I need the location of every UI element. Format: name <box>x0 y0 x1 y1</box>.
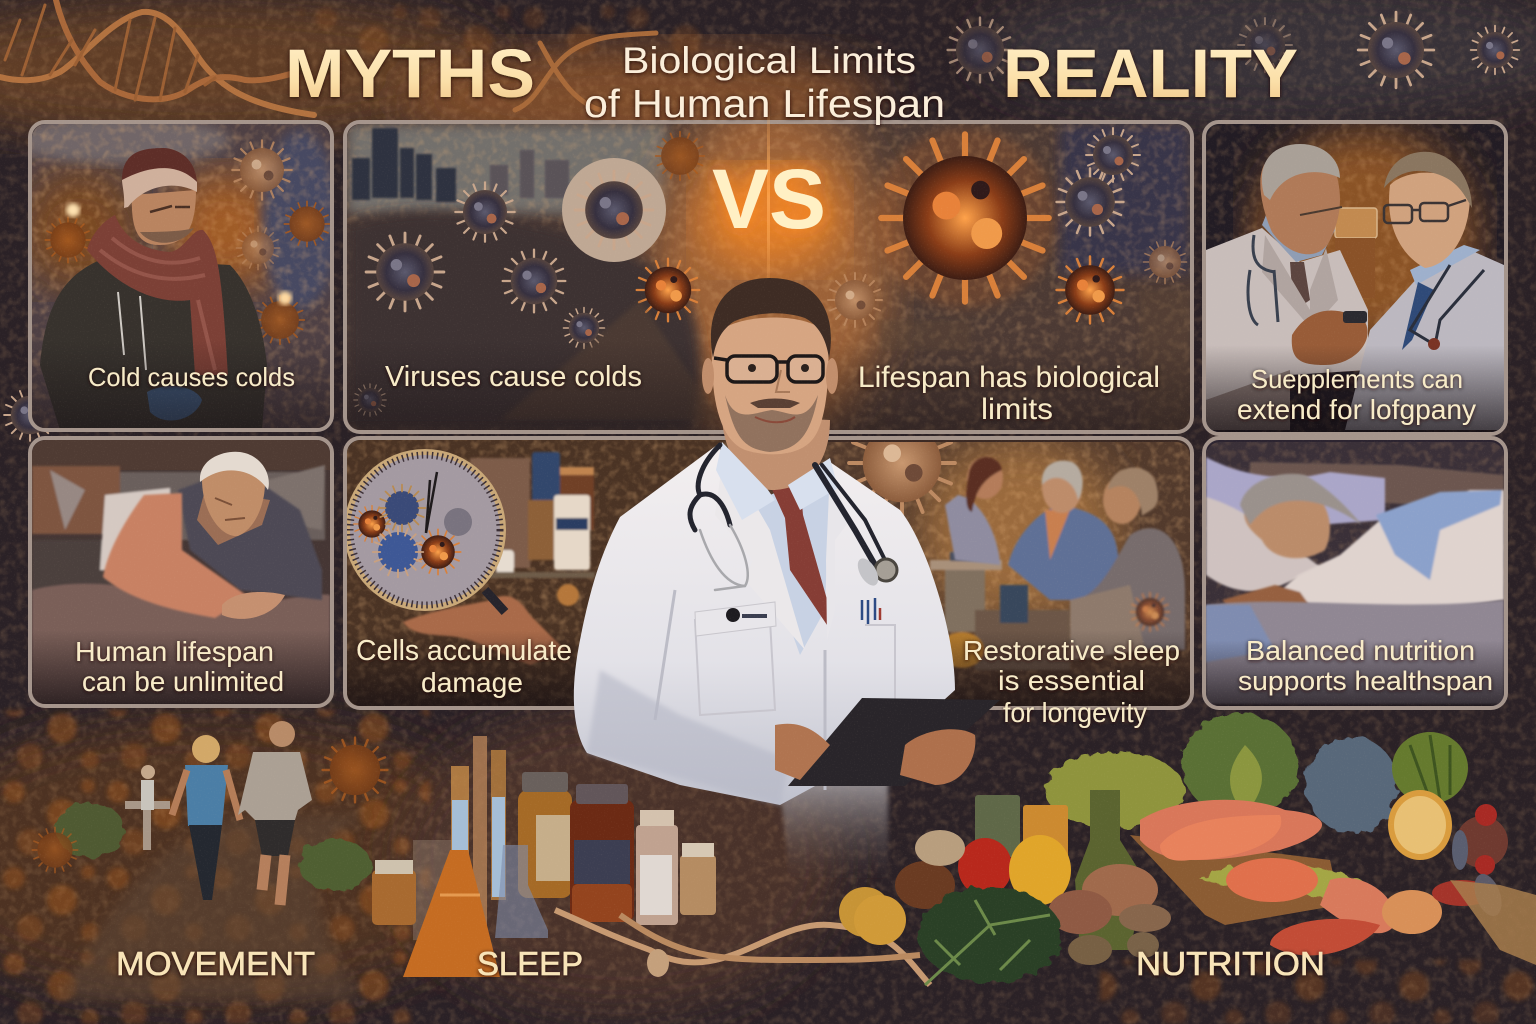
bottom dna helix <box>555 910 930 985</box>
lapels <box>715 447 805 650</box>
man walking <box>238 721 312 905</box>
centre glow and divider <box>700 95 840 295</box>
doctor right <box>1345 152 1504 430</box>
shelf of bottles <box>470 452 595 606</box>
panel: lifespan unlimited <box>30 438 332 706</box>
panel: viruses and lifespan <box>345 100 1192 440</box>
nutrition food spread <box>839 713 1536 985</box>
subtitle: of Human Lifespan <box>584 83 945 126</box>
panel captions <box>75 361 1493 728</box>
tie <box>770 480 830 625</box>
bottom labels <box>116 945 1325 982</box>
title reality: REALITY <box>1003 35 1298 112</box>
panel captions: for longevity <box>1003 697 1147 728</box>
panel captions: supports healthspan <box>1238 666 1493 696</box>
movement scene <box>32 721 387 1000</box>
sleeve shadow <box>587 670 790 805</box>
coat pockets and badge <box>655 590 895 790</box>
coat lower <box>778 770 888 880</box>
viruses in scene <box>354 132 704 416</box>
woman walking <box>172 735 240 900</box>
city skyline <box>352 128 569 202</box>
leafy greens <box>1045 713 1468 833</box>
panel captions: is essential <box>998 665 1145 696</box>
panel captions: can be unlimited <box>82 666 284 697</box>
viruses top right decoration <box>4 12 1519 441</box>
subtitle: Biological Limits <box>622 40 916 81</box>
tomato and orange <box>839 835 1071 945</box>
vs label: VS <box>712 152 826 246</box>
panel captions: Suepplements can <box>1251 364 1463 394</box>
large orange virus <box>828 128 1187 327</box>
shirt <box>178 480 322 600</box>
subtitle <box>584 40 945 126</box>
clipboard <box>788 698 1000 786</box>
bottom labels: NUTRITION <box>1136 945 1325 982</box>
glasses <box>714 356 823 382</box>
doctor left <box>1206 144 1368 430</box>
panel: restorative sleep <box>758 410 1192 708</box>
herbs <box>918 887 1062 985</box>
face <box>712 318 828 454</box>
figure: man in scarf <box>40 148 267 430</box>
pillows <box>1206 457 1385 591</box>
panel captions: Human lifespan <box>75 636 274 667</box>
bottom labels: SLEEP <box>477 945 583 982</box>
dna helix top left <box>0 0 656 115</box>
title myths: MYTHS <box>285 35 535 112</box>
head <box>197 452 270 545</box>
bottom labels: MOVEMENT <box>116 945 315 982</box>
jars <box>975 790 1145 950</box>
coat body <box>574 445 955 805</box>
ears <box>702 358 714 394</box>
panel captions: Viruses cause colds <box>385 361 642 393</box>
panel: supplements <box>1204 122 1506 434</box>
hands <box>775 724 830 780</box>
small figure <box>125 765 170 850</box>
bottles and flasks <box>372 736 716 977</box>
peach blanket <box>103 493 249 618</box>
panel: cold causes colds <box>10 116 338 430</box>
panel captions: Lifespan has biological <box>858 361 1160 394</box>
panel: cells accumulate damage <box>344 438 769 708</box>
sleeping woman <box>1222 474 1504 612</box>
three seated people <box>945 457 1185 660</box>
sheets <box>32 584 330 704</box>
panel: balanced nutrition <box>1204 438 1506 708</box>
magnifier hand <box>403 596 565 665</box>
panel captions: Cells accumulate <box>356 635 572 667</box>
panel captions: extend for lofgpany <box>1237 394 1476 425</box>
table <box>930 552 1070 670</box>
beard <box>725 395 818 452</box>
shirt <box>720 442 830 655</box>
hair <box>711 278 831 358</box>
salmon on board <box>1130 800 1442 955</box>
clock under magnifier <box>344 449 506 612</box>
stethoscope <box>690 445 885 590</box>
test tubes <box>451 766 469 896</box>
panel captions: Balanced nutrition <box>1246 635 1475 666</box>
pillow and headboard <box>32 465 325 600</box>
citrus and berries <box>1388 790 1536 965</box>
doctor <box>574 278 1000 880</box>
neck <box>722 415 830 490</box>
panel captions: Cold causes colds <box>88 362 295 392</box>
amber bottles <box>518 790 572 898</box>
flask <box>403 850 500 977</box>
panel captions: limits <box>981 393 1053 426</box>
nuts <box>895 830 1171 965</box>
panel captions: damage <box>421 667 523 698</box>
panel captions: Restorative sleep <box>963 635 1180 666</box>
